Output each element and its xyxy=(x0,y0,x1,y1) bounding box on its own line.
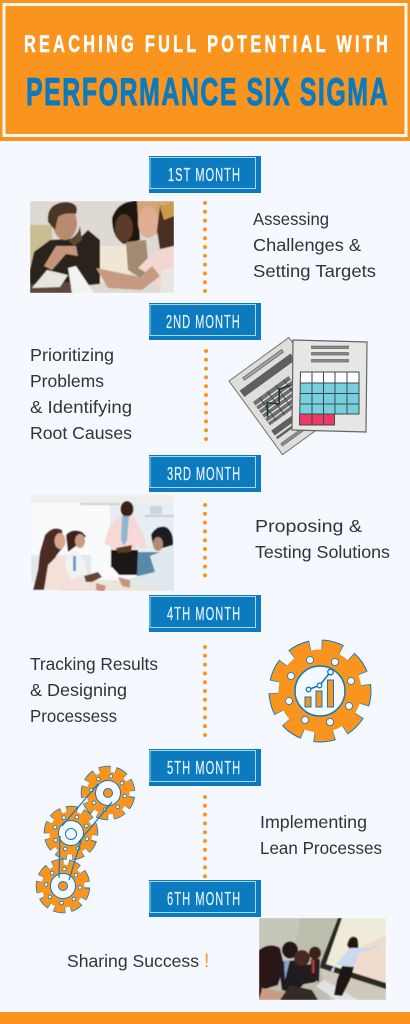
text: sharing success: Sharing Success xyxy=(67,951,199,971)
photo: presenter at projection screen xyxy=(259,918,386,1000)
text: implementing lean processes xyxy=(260,812,382,858)
text: prioritizing problems: Prioritizing xyxy=(30,345,114,365)
text: assessing challenges and setting targets xyxy=(253,209,376,281)
text: assessing challenges and setting targets: Setting Targets xyxy=(253,261,376,281)
text: implementing lean processes: Lean Processes xyxy=(260,838,382,858)
dotted connector 1 xyxy=(203,203,207,292)
icon: report sheets xyxy=(229,338,367,455)
badge: 1st month xyxy=(149,156,261,193)
badge: 3rd month: 3RD MONTH xyxy=(167,464,240,485)
dotted connector 4 xyxy=(203,647,207,736)
badge: 5th month: 5TH MONTH xyxy=(167,758,240,779)
text: tracking results: & Designing xyxy=(30,680,127,700)
badge: 2nd month: 2ND MONTH xyxy=(166,312,240,333)
badge: 4th month xyxy=(149,595,261,632)
header banner xyxy=(0,0,410,141)
icon: gear with growth chart xyxy=(269,640,371,742)
badge: 6th month: 6TH MONTH xyxy=(167,889,240,910)
dotted connector 2 xyxy=(204,351,208,440)
text: prioritizing problems xyxy=(30,345,132,443)
badge: 1st month: 1ST MONTH xyxy=(168,165,240,186)
title line 1: REACHING FULL POTENTIAL WITH xyxy=(24,31,388,58)
badge: 3rd month xyxy=(149,455,261,492)
text: prioritizing problems: & Identifying xyxy=(30,397,132,417)
dotted connector 5 xyxy=(203,797,207,877)
badge: 5th month xyxy=(149,749,261,786)
photo: team reviewing documents xyxy=(30,201,174,293)
icon: linked gears xyxy=(38,766,135,911)
text: prioritizing problems: Root Causes xyxy=(30,423,132,443)
text: tracking results xyxy=(30,654,158,726)
badge: 4th month: 4TH MONTH xyxy=(167,604,240,625)
text: implementing lean processes: Implementing xyxy=(260,812,367,832)
text: sharing success: ! xyxy=(204,951,209,972)
text: proposing and testing solutions: Testing Solutions xyxy=(255,542,390,562)
text: tracking results: Processess xyxy=(30,706,117,726)
title line 2: PERFORMANCE SIX SIGMA xyxy=(26,69,388,113)
footer bar xyxy=(0,1012,410,1024)
text: assessing challenges and setting targets: Challenges & xyxy=(253,235,361,255)
text: proposing and testing solutions: Proposing & xyxy=(255,516,362,536)
photo: presenter with seated team xyxy=(31,495,174,592)
text: tracking results: Tracking Results xyxy=(30,654,158,674)
text: assessing challenges and setting targets: Assessing xyxy=(253,209,329,229)
text: prioritizing problems: Problems xyxy=(30,371,104,391)
dotted connector 3 xyxy=(203,505,207,576)
text: proposing and testing solutions xyxy=(255,516,390,562)
badge: 6th month xyxy=(149,880,261,917)
badge: 2nd month xyxy=(149,303,261,340)
